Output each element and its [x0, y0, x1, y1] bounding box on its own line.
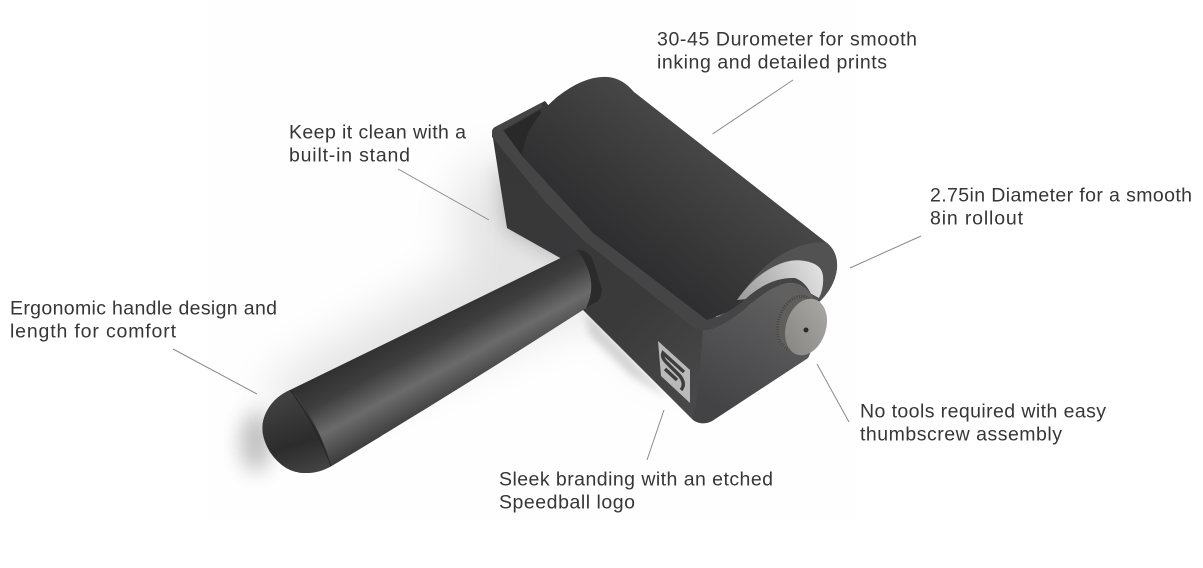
- callout: diameter: 2.75in Diameter for a smooth: [930, 184, 1192, 206]
- frame front: end plate and rim: [492, 103, 816, 423]
- handle collar shade: [577, 250, 602, 308]
- callout: built-in stand: [289, 122, 489, 220]
- roller: [522, 77, 837, 320]
- icon: thumbscrew: [769, 289, 834, 361]
- callout: built-in stand: built-in stand: [289, 144, 410, 166]
- frame end plate: [693, 283, 816, 423]
- callout: branding: [499, 410, 773, 514]
- callout: ergonomic handle: [10, 298, 277, 394]
- frame body: [492, 101, 816, 423]
- callout: durometer: inking and detailed prints: [657, 52, 887, 74]
- icon: etched Speedball logo: [658, 341, 690, 403]
- frame rim: [492, 103, 812, 330]
- callout: thumbscrew: No tools required with easy: [860, 400, 1106, 422]
- thumbscrew hex socket: [804, 328, 808, 332]
- callout: ergonomic handle: length for comfort: [10, 320, 177, 342]
- callout: built-in stand: Keep it clean with a: [289, 122, 466, 144]
- callout: durometer: 30-45 Durometer for smooth: [657, 28, 917, 50]
- callout: thumbscrew: [817, 364, 1106, 446]
- callout: branding: Speedball logo: [499, 492, 635, 514]
- callout: diameter: 8in rollout: [930, 208, 1024, 230]
- cast shadows: [230, 152, 664, 480]
- handle end cap: [262, 390, 331, 473]
- handle shaft: [262, 250, 602, 473]
- roller body: [522, 77, 837, 320]
- callout: diameter: [850, 184, 1192, 268]
- handle: [262, 250, 602, 473]
- callout: durometer: [657, 28, 917, 134]
- callout: thumbscrew: thumbscrew assembly: [860, 424, 1062, 446]
- thumbscrew knurled edge: [769, 289, 825, 357]
- frame: built-in stand: [492, 101, 816, 423]
- callout: ergonomic handle: Ergonomic handle design and: [10, 298, 277, 320]
- silver disc: [737, 260, 823, 300]
- callout: branding: Sleek branding with an etched: [499, 468, 773, 490]
- thumbscrew face: [778, 293, 834, 361]
- roller end ring: [738, 242, 837, 304]
- frame interior: [500, 110, 560, 160]
